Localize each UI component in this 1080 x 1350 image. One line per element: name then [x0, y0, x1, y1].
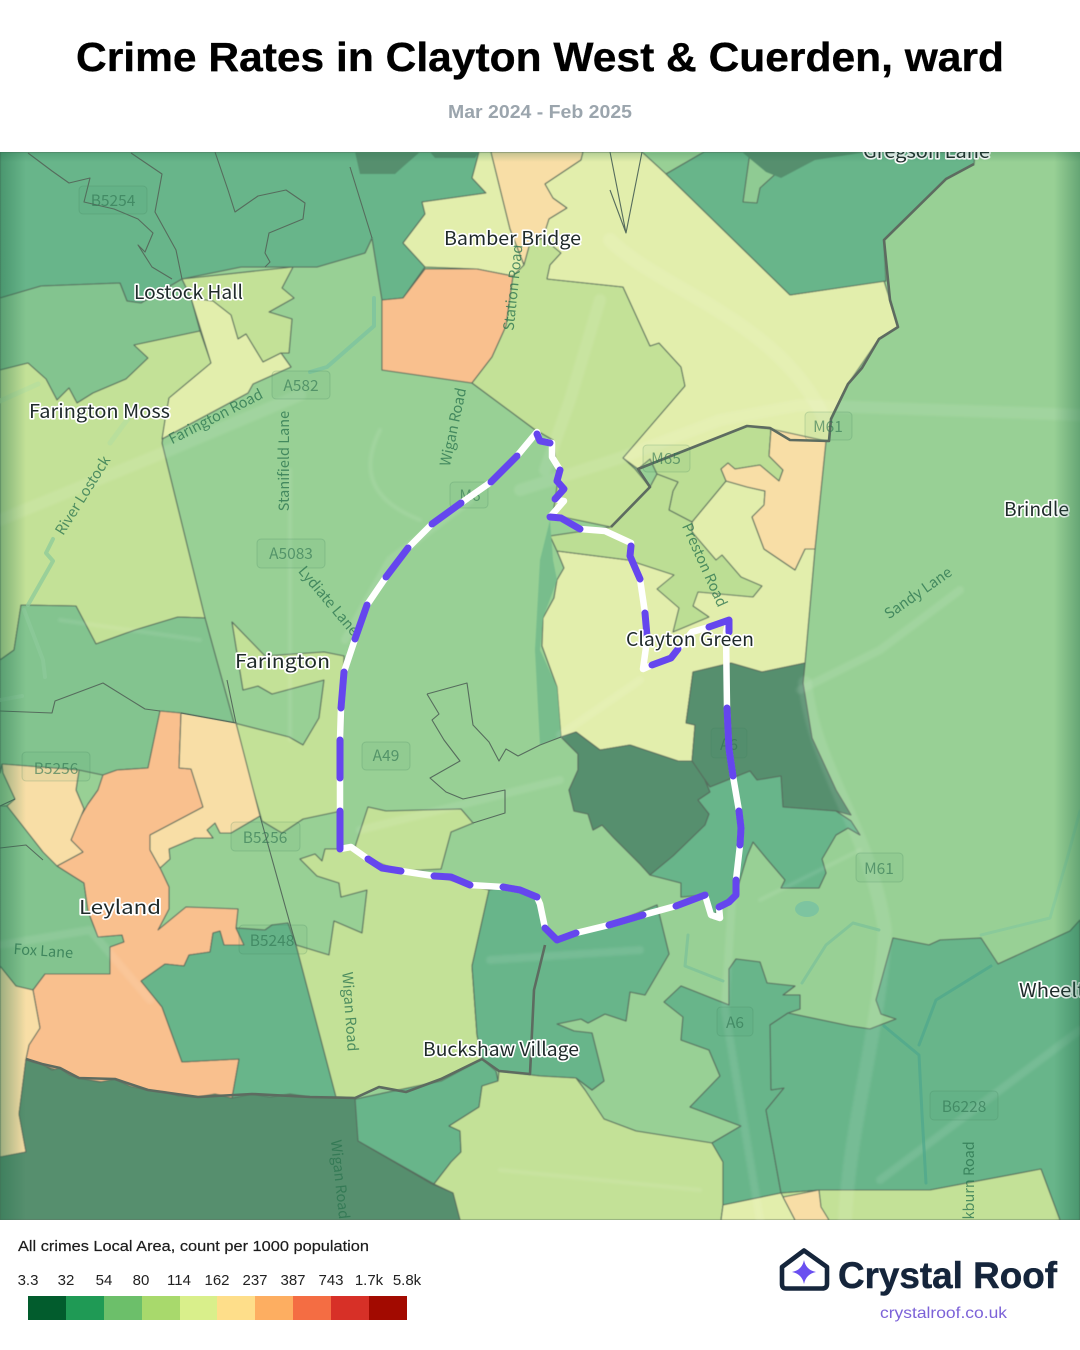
road number labels: B5254 [91, 189, 136, 211]
legend tick labels: 3.3 [18, 1272, 38, 1289]
road number labels: A6 [720, 733, 738, 755]
legend title: All crimes Local Area, count per 1000 population [18, 1238, 369, 1255]
rivers and ponds [0, 298, 1080, 1183]
place names: Farington [235, 647, 330, 674]
legend [18, 1238, 422, 1320]
legend tick labels: 237 [242, 1272, 268, 1289]
place names: Gregson Lane [863, 137, 990, 164]
legend tick labels: 54 [96, 1272, 112, 1289]
place names [29, 137, 1080, 1062]
road number labels: M61 [813, 415, 843, 437]
road number labels: M61 [864, 857, 894, 879]
road and river names: Wigan Road [337, 971, 364, 1052]
road number labels: A6 [726, 1011, 744, 1033]
legend tick labels: 114 [167, 1272, 191, 1289]
legend tick labels: 32 [58, 1272, 74, 1289]
road and river names: Stanifield Lane [273, 411, 294, 511]
logo: Crystal Roof [782, 1250, 1058, 1322]
logo wordmark: Crystal Roof [838, 1255, 1058, 1296]
road and river names: Wigan Road [326, 1139, 355, 1220]
road number labels: B5256 [34, 757, 78, 779]
road number labels: B5248 [250, 929, 294, 951]
icon: house outline [782, 1250, 827, 1288]
legend tick labels: 1.7k [355, 1272, 384, 1289]
legend colour scale [28, 1296, 407, 1320]
place names: Clayton Green [626, 625, 754, 652]
road and river names: Sandy Lane [880, 561, 956, 624]
road and river names: Blackburn Road [958, 1141, 979, 1249]
place names: Lostock Hall [134, 278, 243, 305]
website url: crystalroof.co.uk [880, 1305, 1008, 1322]
road number labels [22, 186, 998, 1120]
road number labels: M65 [651, 447, 681, 469]
road and river names: Wigan Road [434, 386, 471, 468]
legend tick labels [18, 1272, 422, 1289]
ward outline route [340, 432, 741, 940]
interior ward boundaries [0, 152, 642, 945]
title: Crime Rates in Clayton West & Cuerden, ward [76, 34, 1004, 80]
road and river names: Preston Road [677, 519, 733, 610]
road and river names: Farington Road [165, 383, 266, 449]
icon: purple star [792, 1260, 816, 1284]
road and river names [13, 243, 979, 1249]
thick authority boundaries [26, 164, 974, 1098]
road and river names: Station Road [498, 243, 527, 331]
place names: Bamber Bridge [444, 224, 581, 251]
choropleth regions [0, 152, 1080, 1220]
road and river names: Fox Lane [13, 938, 74, 963]
road number labels: B6228 [942, 1095, 986, 1117]
road number labels: A5083 [269, 542, 313, 564]
subtitle: date range: Mar 2024 - Feb 2025 [448, 102, 632, 122]
road network [0, 240, 1080, 1220]
legend tick labels: 162 [204, 1272, 230, 1289]
road number labels: A49 [373, 744, 399, 766]
road number labels: B5256 [243, 826, 287, 848]
road number labels: A582 [283, 374, 319, 396]
map edge vignette [0, 152, 1080, 1220]
road and river names: Lydiate Lane [294, 561, 365, 640]
legend tick labels: 387 [280, 1272, 306, 1289]
road number labels: M6 [459, 484, 481, 506]
place names: Buckshaw Village [423, 1035, 579, 1062]
legend tick labels: 743 [318, 1272, 344, 1289]
road and river names: River Lostock [50, 451, 115, 539]
legend tick labels: 5.8k [393, 1272, 422, 1289]
legend tick labels: 80 [133, 1272, 149, 1289]
place names: Farington Moss [29, 397, 170, 424]
place names: Brindle [1004, 495, 1069, 522]
place names: Leyland [79, 893, 161, 920]
